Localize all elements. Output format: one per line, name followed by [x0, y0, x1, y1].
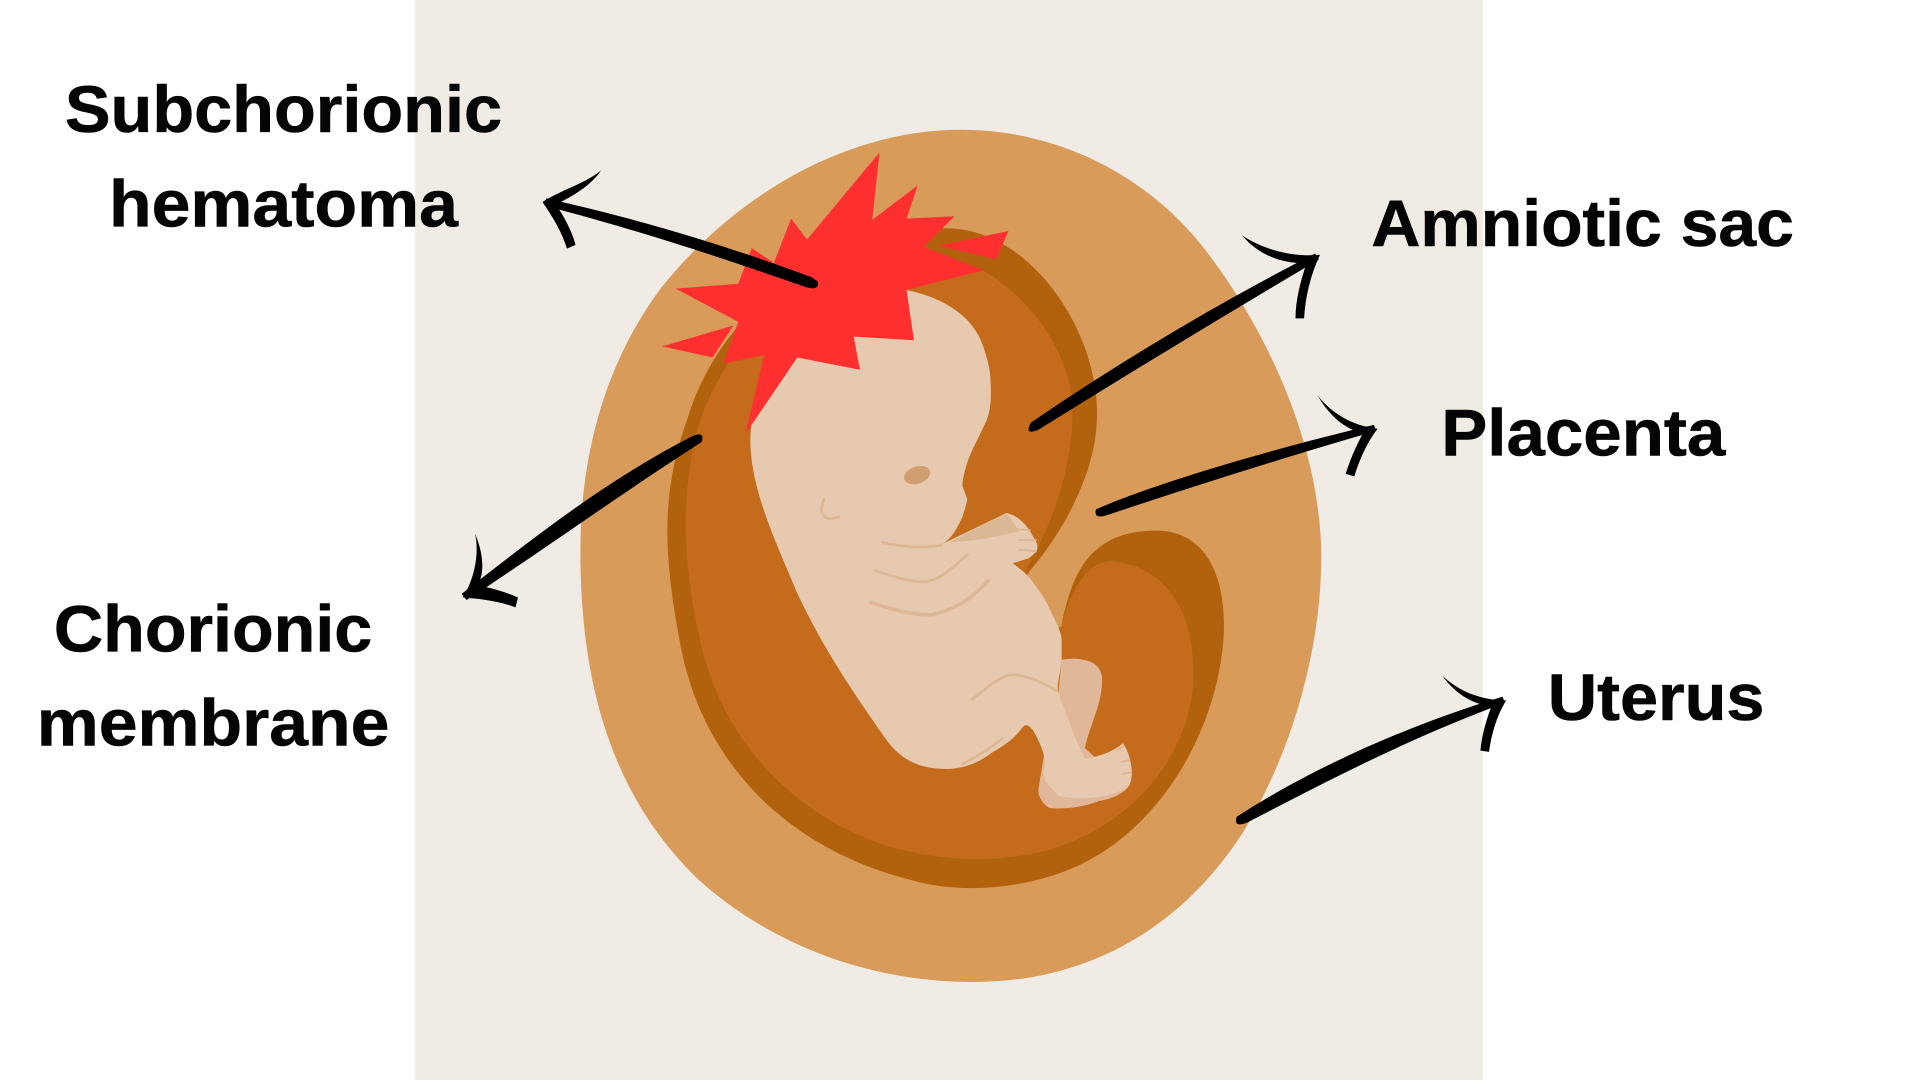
label: Subchorionic hematoma	[65, 73, 502, 242]
label: Subchorionic hematoma: hematoma	[109, 168, 459, 242]
amniotic sac	[686, 262, 1193, 859]
fetus back leg	[1038, 659, 1128, 808]
chorionic membrane	[667, 228, 1224, 888]
fetus face and skin creases	[822, 500, 1057, 764]
fetus fingers and toes	[1011, 529, 1130, 774]
fetus body	[750, 289, 1132, 798]
label: Placenta: Placenta	[1441, 397, 1727, 471]
label: Uterus: Uterus	[1548, 661, 1764, 735]
label: Amniotic sac: Amniotic sac	[1371, 187, 1794, 261]
panel: beige background	[415, 0, 1483, 1080]
arrow: uterus	[1236, 676, 1506, 824]
fetus forearm shading	[949, 514, 1019, 542]
arrow: chorionic membrane	[462, 434, 702, 607]
label: Subchorionic hematoma: Subchorionic	[65, 73, 502, 147]
uterus	[580, 130, 1321, 982]
label: Chorionic membrane: Chorionic	[54, 592, 372, 666]
arrow: amniotic sac	[1029, 235, 1320, 432]
fetus eye	[902, 463, 933, 487]
label: Chorionic membrane	[37, 592, 389, 761]
diagram: fetus in uterus	[580, 130, 1321, 982]
label: Chorionic membrane: membrane	[37, 687, 389, 761]
arrow: subchorionic hematoma	[542, 170, 818, 288]
arrow: placenta	[1096, 396, 1378, 517]
hematoma: red burst	[662, 152, 1009, 434]
